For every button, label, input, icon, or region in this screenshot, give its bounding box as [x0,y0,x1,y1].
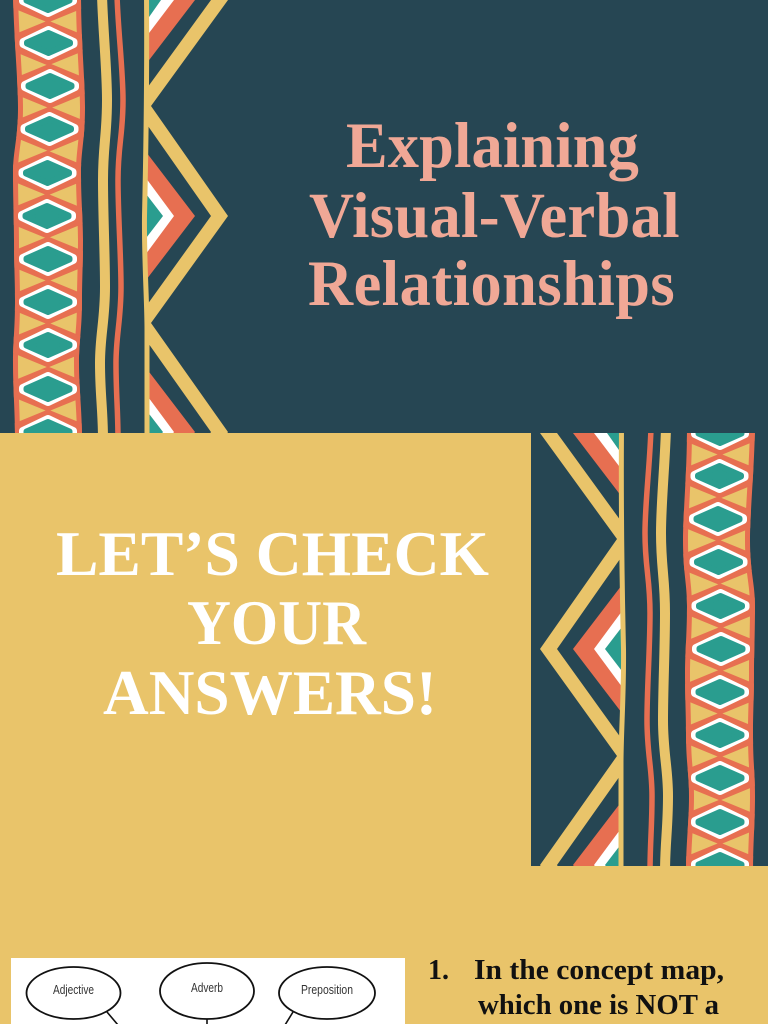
question text [428,955,724,1021]
decorative tribal pattern strip, left [12,0,228,433]
question text: In the concept map, [474,955,724,986]
concept map image [11,958,405,1024]
node: adjective [26,967,120,1019]
decorative tribal pattern strip, right [540,433,755,866]
connector lines [107,1012,293,1024]
heading: let's check your answers: LET’S CHECK [56,519,489,589]
node: adjective: Adjective [53,982,94,997]
panel: dark pattern backdrop, right [531,433,768,866]
node: preposition [279,967,375,1019]
heading: let's check your answers: ANSWERS! [103,658,437,728]
node: preposition: Preposition [301,982,353,997]
question text: 1. [428,955,449,986]
title: Explaining [346,109,639,181]
heading: let's check your answers: YOUR [187,588,367,658]
title: Relationships [308,247,675,319]
heading: let's check your answers [56,519,489,728]
panel: title slide background [0,0,768,433]
node: adverb [160,963,254,1019]
panel: check answers slide background [0,433,768,1024]
title [308,109,680,319]
node: adverb: Adverb [191,980,223,995]
title: Visual-Verbal [309,179,680,251]
question text: which one is NOT a [478,990,719,1021]
